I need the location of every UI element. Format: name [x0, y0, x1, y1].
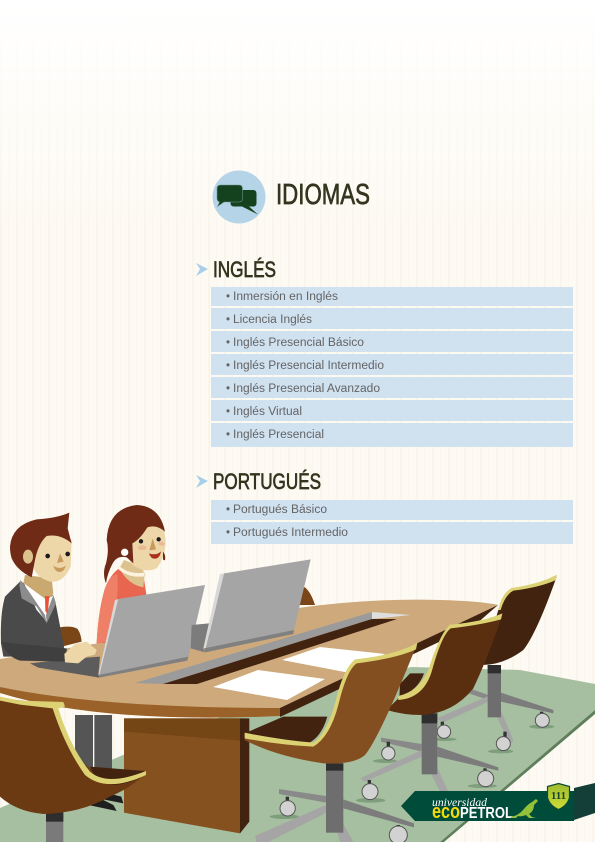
course list: Portugués: [211, 500, 573, 544]
laptop: man: [30, 585, 205, 678]
chair: back right: [433, 575, 557, 753]
course list: Portugués: •: [226, 527, 230, 539]
course list: Portugués: Portugués Intermedio: [233, 527, 348, 539]
course list: Inglés: •: [226, 291, 230, 303]
man's jacket: [1, 582, 64, 657]
woman's necklace: [117, 565, 144, 577]
course list: Inglés: •: [226, 337, 230, 349]
chair: front: [245, 643, 417, 842]
course list: Portugués: •: [226, 504, 230, 516]
conference table: [0, 600, 498, 718]
course list: Portugués: Portugués Básico: [233, 504, 327, 516]
woman's face: [128, 522, 166, 570]
course list: Inglés: Inmersión en Inglés: [233, 291, 338, 303]
man's legs: [75, 715, 123, 811]
man's neck: [23, 575, 53, 603]
course list: Inglés: •: [226, 383, 230, 395]
course list: Inglés: •: [226, 360, 230, 372]
logo: universidad ecopetrol: eco: [432, 801, 460, 823]
banner tail: [574, 783, 595, 820]
heading: Inglés: INGLÉS: [213, 257, 276, 282]
course list: Inglés: •: [226, 406, 230, 418]
logo: universidad ecopetrol: [432, 795, 513, 823]
far chair behind table: [298, 585, 315, 605]
title: IDIOMAS: [276, 179, 370, 211]
course list: Inglés: •: [226, 314, 230, 326]
banner body: [401, 791, 574, 821]
man's shirt: [24, 583, 56, 622]
man's arm and hand: [1, 642, 97, 663]
logo: universidad ecopetrol: PETROL: [460, 805, 513, 822]
man's lapel: [19, 580, 47, 623]
course list: Inglés: Inglés Virtual: [233, 406, 302, 418]
laptop: woman: [191, 559, 311, 652]
man's hair: [10, 513, 72, 577]
icon: speech bubbles: [212, 170, 266, 224]
man's face: [32, 530, 72, 582]
floor edge: [440, 710, 595, 842]
logo: universidad ecopetrol: universidad: [432, 795, 488, 809]
section arrow: Portugués: [196, 475, 208, 488]
course list: Inglés: Inglés Presencial Intermedio: [233, 360, 384, 372]
woman: [97, 505, 166, 647]
chair: middle: [356, 613, 502, 803]
woman's sweater: [97, 568, 147, 647]
page number shield: 111: [551, 790, 566, 802]
woman's hair: [104, 505, 165, 583]
footer banner: [401, 783, 595, 823]
desk pedestal: [124, 718, 249, 833]
course list: Inglés: Inglés Presencial Avanzado: [233, 383, 380, 395]
woman's neck: [119, 560, 145, 587]
slot in table: [135, 612, 411, 684]
icon: iguana: [510, 799, 538, 818]
course list: Inglés: •: [226, 429, 230, 441]
papers on table: [213, 647, 385, 700]
chair: left foreground: [0, 697, 146, 842]
course list: Inglés: Inglés Presencial Básico: [233, 337, 364, 349]
man: [1, 513, 82, 657]
section arrow: Inglés: [196, 263, 208, 276]
course list: Inglés: [211, 287, 573, 447]
page number shield: [548, 784, 570, 810]
floor: [0, 667, 595, 842]
course list: Inglés: Inglés Presencial: [233, 429, 324, 441]
heading: Portugués: PORTUGUÉS: [213, 469, 321, 494]
course list: Inglés: Licencia Inglés: [233, 314, 312, 326]
